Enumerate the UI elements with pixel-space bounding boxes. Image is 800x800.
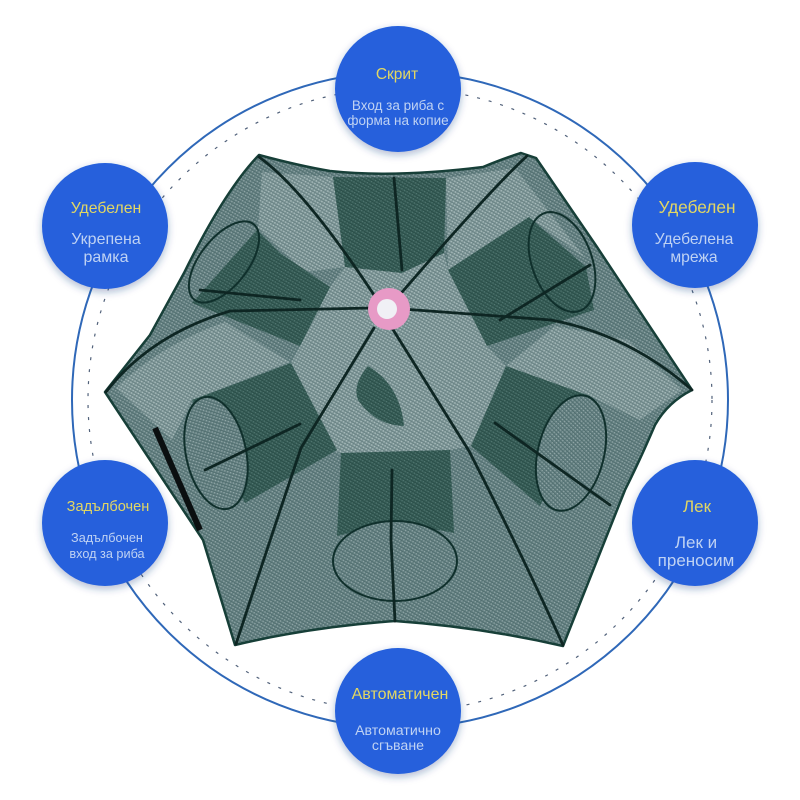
badge title: Удебелен (71, 200, 141, 217)
badge description: вход за риба (69, 547, 146, 561)
dark funnel: bottom (337, 450, 454, 536)
badge: lower right (632, 460, 758, 586)
pink hub (368, 288, 410, 330)
badge: top (335, 26, 461, 152)
dark funnel: upper right (448, 217, 594, 346)
badge: lower left (42, 460, 168, 586)
badge description: преносим (658, 551, 734, 570)
badge title: Лек (683, 497, 712, 516)
dark oval pocket (356, 366, 404, 426)
badge title: Удебелен (658, 197, 736, 217)
upper rings (176, 203, 608, 321)
outer solid ring (72, 72, 728, 728)
fishing trap net (105, 153, 692, 646)
dark funnel: top (333, 177, 446, 273)
badge description: сгъване (372, 738, 424, 754)
dark funnel: lower left (192, 363, 337, 503)
badge description: мрежа (670, 249, 718, 266)
badge description: Вход за риба с (352, 98, 444, 113)
badge: bottom (335, 648, 461, 774)
badge description: Задълбочен (71, 531, 143, 545)
badge description: рамка (83, 249, 129, 266)
frame ribs (106, 156, 692, 645)
light mesh panels (116, 168, 682, 453)
badge description: Укрепена (71, 231, 141, 248)
inner dashed ring (88, 88, 712, 712)
dark funnel: upper left (192, 230, 330, 346)
badge description: форма на копие (347, 113, 449, 128)
badge title: Скрит (376, 66, 418, 83)
badge description: Лек и (675, 533, 717, 552)
badge description: Автоматично (355, 723, 441, 739)
badge: upper left (42, 163, 168, 289)
black handle strap (155, 428, 200, 530)
net body outline (105, 153, 692, 646)
badge: upper right (632, 162, 758, 288)
dark funnel: lower right (471, 366, 590, 506)
badge title: Задълбочен (67, 499, 149, 515)
badge description: Удебелена (655, 231, 734, 248)
badge title: Автоматичен (352, 686, 448, 703)
funnel rings (175, 388, 617, 601)
